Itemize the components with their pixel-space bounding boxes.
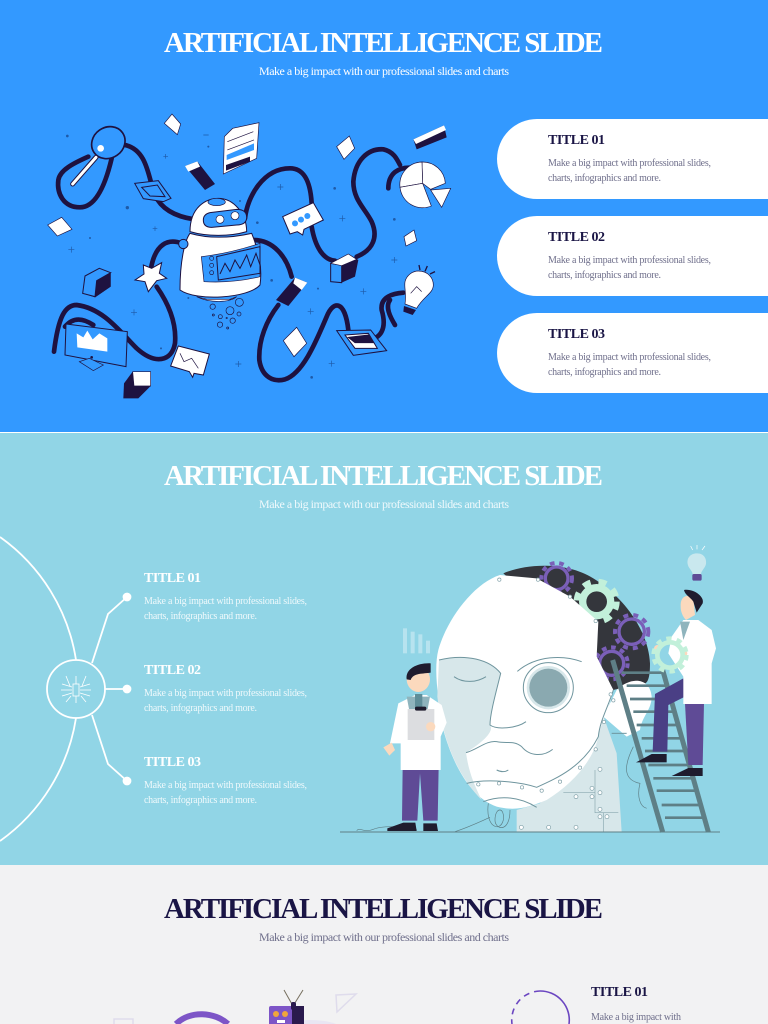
- icons: tablets: [135, 181, 387, 355]
- text block: title 01: Make a big impact with: [591, 1012, 681, 1023]
- text block: title 03: charts, infographics and more.: [144, 795, 257, 806]
- card: title 01: Make a big impact with professional slides,: [548, 158, 711, 169]
- text block: title 02: [144, 663, 307, 714]
- panel: blue slide: [0, 0, 768, 432]
- subtitle: Make a big impact with our professional slides and charts: [259, 497, 509, 511]
- illustration: robot with cables: [48, 114, 451, 398]
- divider: [0, 432, 768, 433]
- gear: mint: [577, 582, 617, 622]
- ground line: [340, 830, 720, 833]
- diagram: hub and connectors: [0, 537, 130, 841]
- title: ARTIFICIAL INTELLIGENCE SLIDE: [164, 460, 603, 492]
- card: title 03: Make a big impact with professional slides,: [548, 352, 711, 363]
- text block: title 02: TITLE 02: [144, 663, 201, 678]
- title: ARTIFICIAL INTELLIGENCE SLIDE: [164, 27, 603, 59]
- panel: teal slide: [0, 433, 768, 865]
- ear: [603, 681, 652, 737]
- card: title 02: charts, infographics and more.: [548, 270, 661, 281]
- card: title 02: [497, 216, 768, 296]
- figure: left engineer: [383, 663, 447, 831]
- eye: [523, 663, 573, 713]
- icon: document: [223, 123, 259, 174]
- subtitle: Make a big impact with our professional slides and charts: [259, 930, 509, 944]
- text block: title 01: TITLE 01: [591, 985, 648, 1000]
- ladder: [613, 660, 708, 832]
- text block: title 01: TITLE 01: [144, 571, 201, 586]
- icon: light bulb: [403, 265, 435, 315]
- icons: cuboids: [83, 125, 447, 398]
- text block: title 03: TITLE 03: [144, 755, 201, 770]
- panel: gray slide: [0, 865, 768, 1024]
- icon: robot: [179, 198, 261, 329]
- face lines: [439, 657, 627, 807]
- icon: monitor: [65, 324, 127, 371]
- rivets: [477, 578, 615, 829]
- bars icon: [403, 628, 430, 653]
- title: ARTIFICIAL INTELLIGENCE SLIDE: [164, 893, 603, 925]
- face: [436, 575, 613, 809]
- card: title 03: [497, 313, 768, 393]
- icons: white tiles: [48, 114, 417, 357]
- icon: chat bubble: [283, 203, 323, 235]
- neck: [517, 707, 622, 832]
- card: title 01: TITLE 01: [548, 133, 605, 148]
- text block: title 03: Make a big impact with professional slides,: [144, 780, 307, 791]
- card: title 02: TITLE 02: [548, 230, 605, 245]
- text block: title 01: [591, 985, 681, 1023]
- text block: title 01: Make a big impact with professional slides,: [144, 596, 307, 607]
- decorative dots and sparkles: [66, 135, 397, 379]
- text block: title 01: [144, 571, 307, 622]
- icon: light bulb: [687, 545, 706, 581]
- card: title 02: Make a big impact with professional slides,: [548, 255, 711, 266]
- gear held: [653, 638, 687, 672]
- icon: star: [135, 263, 167, 292]
- wires: [357, 747, 647, 832]
- ring: dashed progress: [512, 991, 569, 1024]
- card: title 03: TITLE 03: [548, 327, 605, 342]
- icon: magnifier: [73, 120, 131, 184]
- text block: title 02: charts, infographics and more.: [144, 703, 257, 714]
- text block: title 02: Make a big impact with professional slides,: [144, 688, 307, 699]
- subtitle: Make a big impact with our professional slides and charts: [259, 64, 509, 78]
- icon: small chart card: [171, 346, 209, 377]
- card: title 03: charts, infographics and more.: [548, 367, 661, 378]
- text block: title 01: charts, infographics and more.: [144, 611, 257, 622]
- text block: title 03: [144, 755, 307, 806]
- figure: right engineer: [636, 590, 716, 776]
- illustration: robot head with engineers: [340, 545, 720, 832]
- illustration: robot fragment: [114, 990, 356, 1024]
- card: title 01: [497, 119, 768, 199]
- icon: circuit chip: [61, 676, 91, 703]
- icon: pie chart: [400, 162, 451, 208]
- card: title 01: charts, infographics and more.: [548, 173, 661, 184]
